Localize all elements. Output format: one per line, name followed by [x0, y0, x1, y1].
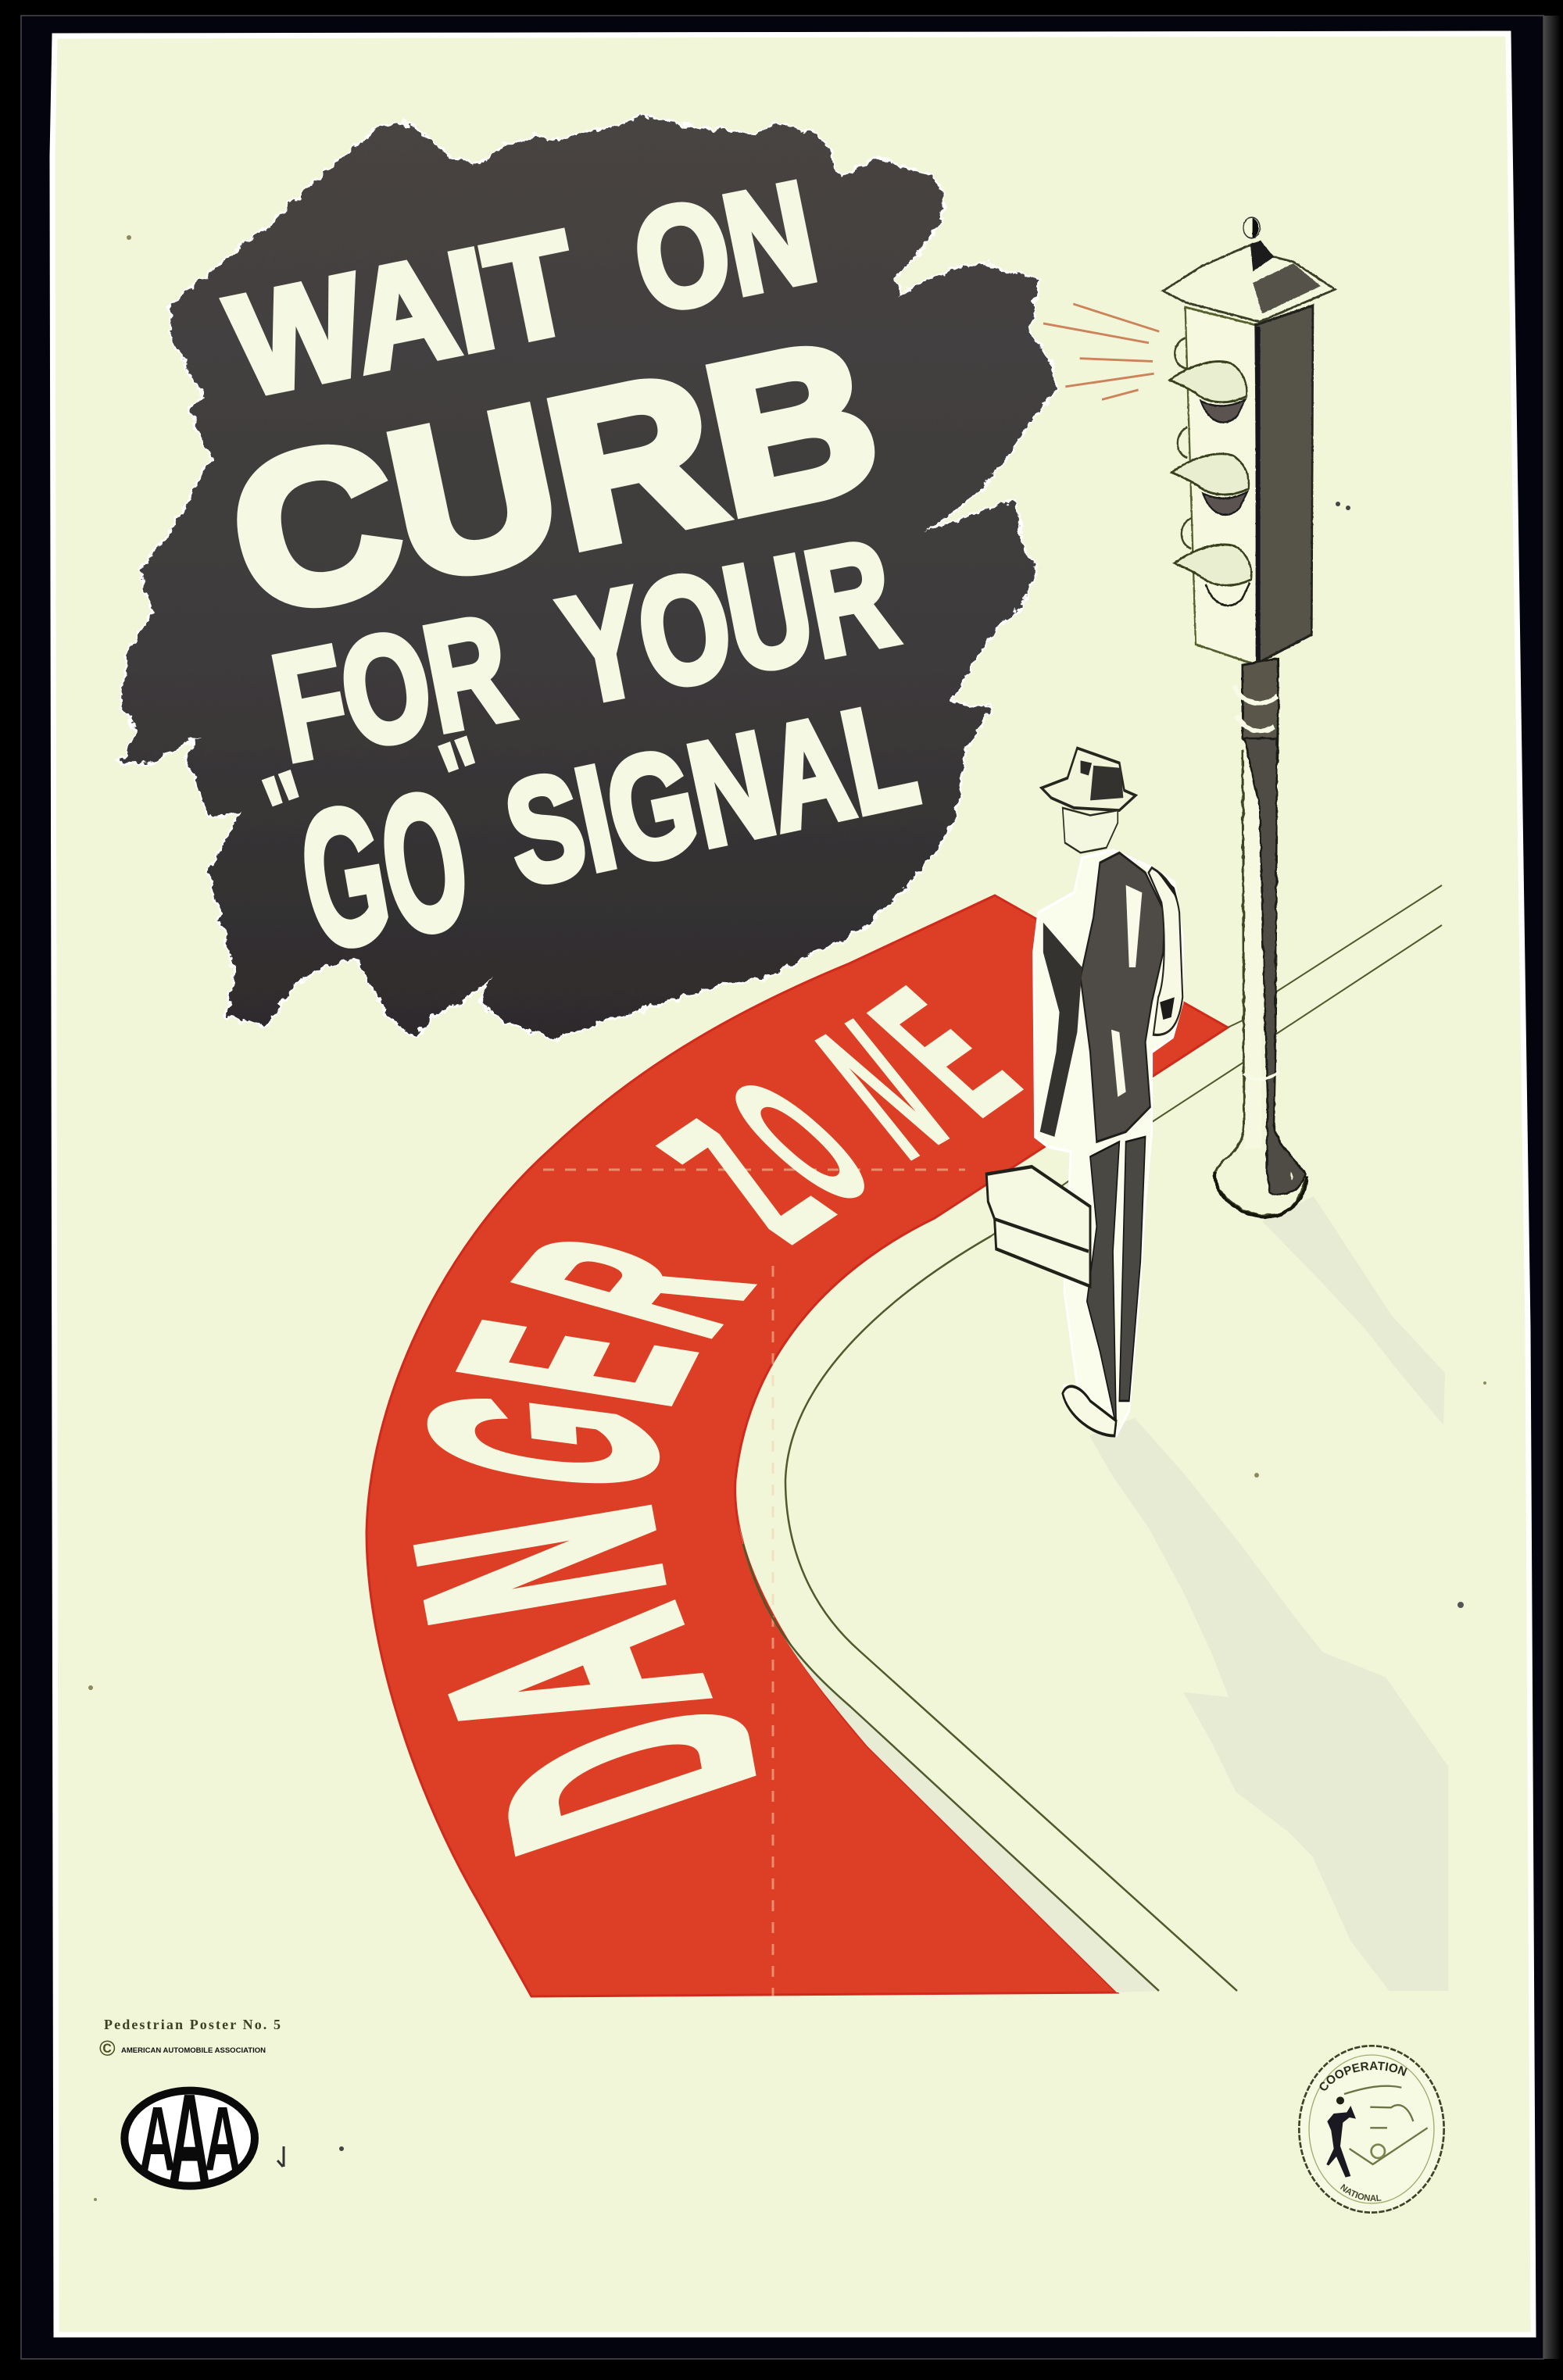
copyright line: AMERICAN AUTOMOBILE ASSOCIATION — [121, 2046, 266, 2055]
headline: quoted go: " — [250, 748, 327, 872]
signal roof — [1163, 244, 1335, 322]
pole collar — [1243, 659, 1279, 762]
DANGER ZONE lettering: A — [370, 1584, 777, 1772]
pole shaft light side — [1244, 750, 1261, 1149]
DANGER ZONE lettering: N — [349, 1488, 731, 1642]
DANGER ZONE lettering: D — [434, 1666, 821, 1885]
copyright line: © — [99, 2036, 116, 2060]
DANGER ZONE lettering: G — [367, 1378, 720, 1504]
fold lines — [543, 1170, 965, 1996]
hat — [1042, 748, 1136, 810]
bottom lens and visor — [1175, 518, 1251, 606]
pedestrian man — [986, 748, 1182, 1436]
top lens and visor — [1170, 338, 1246, 423]
middle lens and visor — [1171, 427, 1249, 515]
signal light rays — [1043, 304, 1159, 399]
DANGER ZONE lettering: E — [395, 1306, 757, 1420]
trousers — [1087, 1137, 1146, 1426]
paper specks — [88, 235, 1486, 2201]
headline: quoted go — [250, 714, 504, 990]
head — [1063, 808, 1118, 852]
AAA logo: A — [139, 2088, 176, 2189]
seal text top: COOPERATION — [1319, 2061, 1407, 2091]
AAA logo: A — [168, 2068, 211, 2212]
jacket back — [1081, 852, 1164, 1142]
DANGER ZONE lettering: Z — [612, 1088, 878, 1274]
headline: quoted go: " — [426, 714, 504, 838]
seal walking figure — [1326, 2106, 1356, 2178]
DANGER ZONE lettering: R — [452, 1213, 810, 1358]
headline: quoted go: GO — [286, 751, 483, 990]
signal body front — [1186, 307, 1257, 666]
AAA logo: A — [205, 2088, 241, 2189]
ink blob — [122, 116, 1055, 1039]
cooperation seal — [1298, 2045, 1445, 2214]
jacket left sleeve shading — [1040, 923, 1082, 1137]
pole shaft dark side — [1244, 738, 1305, 1195]
headline: signal: SIGNAL — [493, 670, 929, 917]
man white silhouette — [1033, 850, 1182, 1436]
signal body side — [1256, 306, 1313, 662]
copyright line — [99, 2036, 266, 2060]
DANGER ZONE lettering: N — [782, 980, 983, 1199]
pedestrian shadow — [1089, 1418, 1449, 1991]
jacket highlights — [1111, 885, 1142, 1097]
seal text bottom: NATIONAL — [1339, 2184, 1382, 2202]
small mark near logo — [277, 2146, 284, 2167]
headline: for your: YOUR — [550, 507, 907, 736]
traffic signal — [1163, 217, 1335, 666]
headline: for your — [261, 507, 907, 792]
headline: for your: FOR — [261, 582, 523, 792]
headline: wait on — [218, 152, 828, 427]
DANGER ZONE lettering: O — [686, 1044, 914, 1239]
poster number caption: Pedestrian Poster No. 5 — [104, 2017, 281, 2032]
signal pole — [1215, 659, 1307, 1217]
finial — [1243, 217, 1260, 238]
DANGER ZONE lettering — [349, 952, 1060, 1885]
briefcase — [986, 1167, 1090, 1286]
curb strip and lines — [739, 885, 1442, 1992]
shoe — [1063, 1386, 1116, 1436]
red danger zone road — [367, 895, 1228, 1996]
pole shadow — [1262, 1196, 1445, 1425]
DANGER ZONE lettering: E — [828, 952, 1060, 1152]
headline: wait on: ON — [621, 152, 828, 343]
seal car outline — [1344, 2086, 1428, 2164]
AAA logo — [124, 2068, 255, 2212]
headline: curb: CURB — [212, 293, 896, 660]
headline: wait on: WAIT — [218, 202, 588, 427]
right arm — [1149, 867, 1182, 1035]
